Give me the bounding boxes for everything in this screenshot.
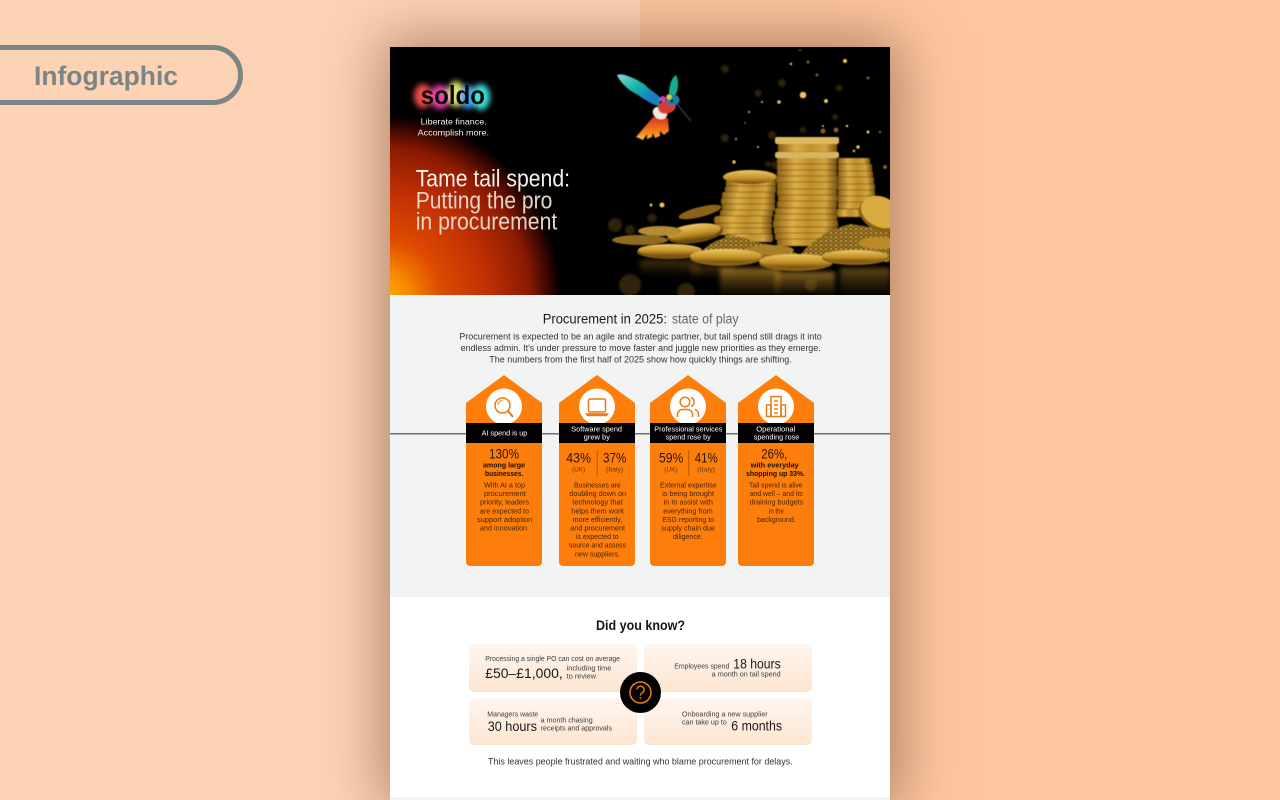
gold dust piles (700, 224, 890, 262)
card: software spend: and procurement (570, 526, 625, 532)
fact: supplier onboarding: can take up to (682, 720, 727, 727)
fact: PO cost: including time (567, 666, 611, 673)
icon: question mark (620, 672, 661, 713)
hummingbird (617, 74, 691, 140)
card: professional services: (UK) (664, 468, 678, 474)
hero title: Putting the pro (416, 188, 552, 215)
panel: did you know (390, 597, 890, 800)
card: software spend (559, 375, 635, 566)
card: AI spend: AI spend is up (482, 430, 527, 437)
card: AI spend: among large (483, 463, 525, 470)
card: software spend: Software spend (571, 426, 622, 434)
card: software spend: grew by (584, 434, 611, 442)
tilted and flat coins (666, 228, 724, 244)
coin stacks (612, 137, 907, 271)
fact: manager hours: Managers waste (487, 711, 538, 718)
fact: PO cost (469, 644, 637, 692)
card: AI spend: and innovation. (480, 526, 529, 532)
card: professional services: is being brought (662, 491, 714, 498)
card: software spend: technology that (572, 500, 623, 507)
card: operational spending: shopping up 33%. (746, 471, 805, 478)
page tag: Infographic: Infographic (34, 61, 178, 91)
card: operational spending: and well – and its (750, 491, 803, 498)
card: operational spending: spending rose (754, 434, 799, 442)
fact: supplier onboarding: 6 months (731, 718, 782, 734)
tagline: Liberate finance. (421, 116, 487, 126)
intro paragraph: The numbers from the first half of 2025 show how quickly things are shifting. (489, 354, 792, 364)
fact: supplier onboarding: Onboarding a new supplier (682, 711, 768, 718)
fact: employee hours: a month on tail spend (712, 672, 781, 679)
card: software spend: is expected to (576, 534, 619, 541)
card: operational spending: with everyday (750, 463, 799, 470)
page tag: Infographic (0, 48, 240, 102)
card: AI spend (466, 375, 542, 566)
card: professional services: diligence. (673, 534, 703, 541)
intro paragraph (459, 332, 822, 364)
card: software spend: source and assess (569, 543, 626, 550)
card: AI spend: 130% (489, 446, 519, 462)
fact: manager hours (469, 698, 637, 745)
card: software spend: 43% (566, 450, 591, 466)
tagline (418, 118, 488, 137)
state of play heading (543, 312, 739, 326)
hero title: Tame tail spend: (416, 165, 570, 192)
right stack (836, 158, 875, 217)
card: professional services: External expertise (660, 482, 717, 490)
card: software spend: new suppliers. (575, 551, 620, 558)
panel: state of play (390, 295, 890, 597)
card: software spend: helps them work (571, 508, 625, 515)
card: operational spending: in the (769, 508, 784, 515)
fact: manager hours: receipts and approvals (541, 726, 612, 733)
intro paragraph: Procurement is expected to be an agile and strategic partner, but tail spend still drags it into (459, 332, 822, 342)
fact: supplier onboarding (644, 698, 812, 745)
card: software spend: (Italy) (606, 468, 623, 474)
soldo logo: soldo (421, 80, 485, 110)
closing note: This leaves people frustrated and waiting who blame procurement for delays. (488, 756, 793, 766)
card: AI spend: procurement (484, 491, 526, 498)
state of play heading: Procurement in 2025: (543, 312, 667, 326)
hero title (416, 165, 570, 235)
state of play heading: state of play (672, 312, 739, 326)
card: professional services: 41% (695, 450, 718, 466)
fact: manager hours: 30 hours (488, 718, 537, 734)
card: software spend: Businesses are (574, 482, 621, 490)
card: professional services: supply chain due (661, 526, 715, 532)
main stack (773, 143, 838, 246)
card: software spend: (UK) (572, 468, 585, 474)
card: software spend: doubling down on (569, 491, 626, 498)
fact: employee hours (644, 644, 812, 692)
fact: PO cost: Processing a single PO can cost on average (485, 656, 620, 663)
fact: manager hours: a month chasing (541, 717, 593, 724)
card: professional services: in to assist with (664, 500, 713, 507)
fact: employee hours: Employees spend (674, 664, 729, 671)
card: professional services: everything from (663, 508, 713, 515)
card: operational spending: background. (757, 517, 796, 524)
card: operational spending: draining budgets (750, 500, 804, 507)
icon: laptop (579, 388, 615, 424)
fact: PO cost: to review (567, 674, 597, 681)
card: professional services: 59% (659, 450, 683, 466)
tagline: Accomplish more. (418, 127, 489, 137)
fact: employee hours: 18 hours (733, 656, 781, 672)
card: AI spend: With AI a top (484, 482, 525, 490)
card: AI spend: priority, leaders (480, 500, 530, 507)
icon: office buildings (758, 388, 794, 424)
card: AI spend: are expected to (480, 508, 529, 515)
card: operational spending: Tail spend is alive (749, 482, 803, 490)
card: professional services: (Italy) (697, 468, 715, 474)
card: AI spend: support adoption (477, 517, 532, 524)
card: AI spend: businesses. (485, 471, 523, 478)
card: professional services (650, 375, 726, 566)
intro paragraph: endless admin. It's under pressure to move faster and juggle new priorities as they emerge. (461, 343, 821, 353)
card: professional services: Professional services (654, 426, 723, 434)
coin reflections (640, 260, 890, 295)
icon: people (670, 388, 706, 424)
card: operational spending: 26%, (761, 446, 787, 462)
icon: magnifying glass (486, 388, 522, 424)
hero title: in procurement (416, 208, 558, 235)
left stack (714, 180, 776, 242)
card: professional services: ESG reporting to (662, 517, 714, 524)
card: professional services: spend rose by (666, 434, 711, 442)
hero banner (385, 47, 907, 301)
card: software spend: 37% (603, 450, 626, 466)
card: software spend: more efficiently, (573, 517, 622, 524)
card: operational spending: Operational (756, 426, 796, 434)
card: operational spending (738, 375, 814, 566)
bokeh and gold sparks (608, 49, 887, 301)
did you know heading: Did you know? (596, 617, 685, 633)
fact: PO cost: £50–£1,000, (485, 665, 563, 681)
